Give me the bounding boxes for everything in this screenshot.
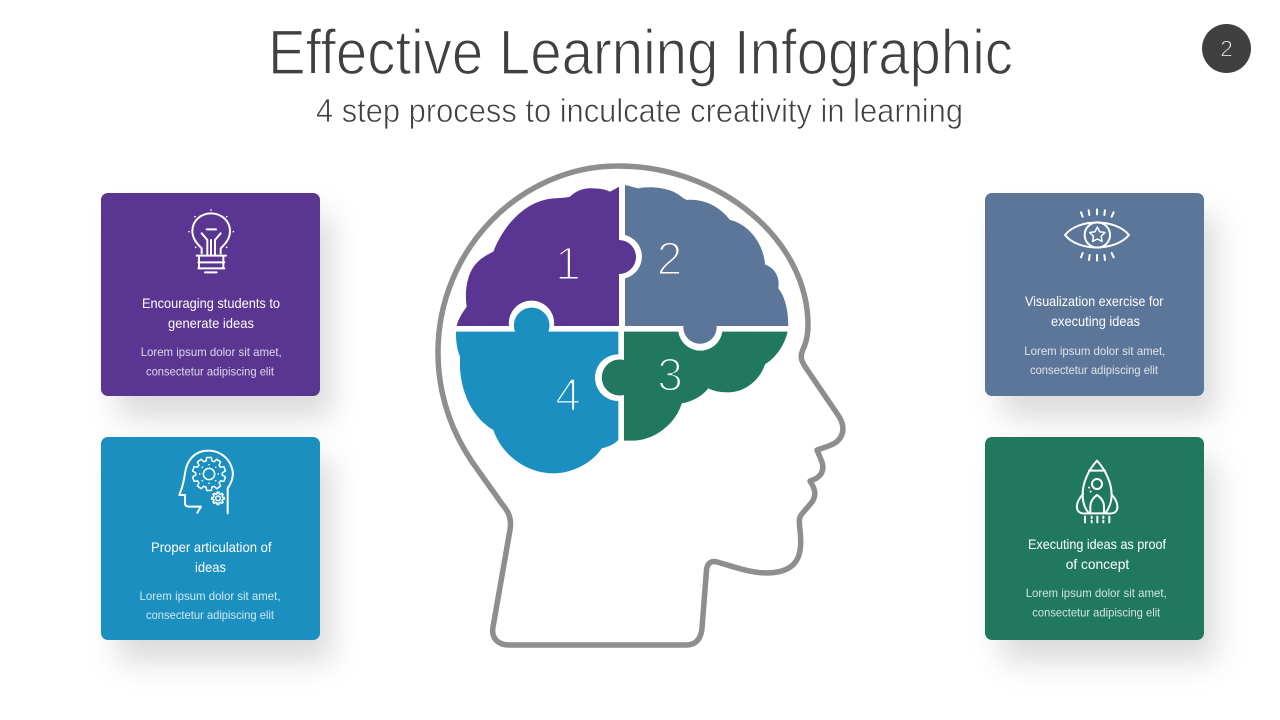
puzzle piece 3: 3 bbox=[657, 348, 683, 400]
puzzle piece 3 bbox=[602, 332, 788, 441]
card body text bbox=[140, 589, 280, 622]
card body text: Lorem ipsum dolor sit amet, bbox=[141, 345, 282, 359]
card heading bbox=[142, 295, 280, 331]
puzzle piece 4: 4 bbox=[555, 368, 581, 420]
icon: eye with star bbox=[1065, 209, 1129, 261]
card body text: consectetur adipiscing elit bbox=[1030, 363, 1159, 377]
card body text: Lorem ipsum dolor sit amet, bbox=[140, 589, 280, 603]
icon: head with gears bbox=[179, 451, 233, 513]
puzzle piece 2 bbox=[625, 185, 788, 344]
card body text bbox=[141, 345, 282, 378]
card heading: Visualization exercise for bbox=[1025, 293, 1164, 309]
card body text: Lorem ipsum dolor sit amet, bbox=[1026, 586, 1167, 600]
card heading bbox=[1028, 536, 1166, 572]
icon: rocket bbox=[1077, 461, 1117, 522]
page number badge: 2 bbox=[1220, 36, 1233, 62]
subtitle: 4 step process to inculcate creativity in learning bbox=[316, 92, 963, 129]
card body text: consectetur adipiscing elit bbox=[146, 364, 275, 378]
card heading: Executing ideas as proof bbox=[1028, 536, 1166, 552]
card body text bbox=[1024, 344, 1165, 377]
page number badge bbox=[1202, 24, 1251, 73]
card heading bbox=[1025, 293, 1164, 329]
card heading: generate ideas bbox=[168, 315, 254, 331]
panel: step 3 green card bbox=[985, 437, 1216, 662]
card heading: of concept bbox=[1066, 556, 1129, 572]
card heading: executing ideas bbox=[1051, 313, 1140, 329]
puzzle piece 1 bbox=[457, 187, 636, 326]
card body text: consectetur adipiscing elit bbox=[1032, 606, 1161, 620]
head outline bbox=[438, 166, 843, 645]
icon: light bulb bbox=[188, 209, 234, 272]
panel: step 2 slate card bbox=[985, 193, 1216, 418]
card body text: consectetur adipiscing elit bbox=[146, 608, 275, 622]
puzzle piece 2: 2 bbox=[657, 232, 682, 284]
puzzle piece 4 bbox=[456, 308, 618, 473]
brain puzzle bbox=[456, 185, 788, 473]
title: Effective Learning Infographic bbox=[268, 18, 1013, 88]
puzzle piece 1: 1 bbox=[555, 238, 581, 290]
panel: step 4 blue card bbox=[101, 437, 332, 662]
card heading: Encouraging students to bbox=[142, 295, 280, 311]
panel: step 1 purple card bbox=[101, 193, 332, 418]
card heading: ideas bbox=[195, 559, 226, 575]
card body text: Lorem ipsum dolor sit amet, bbox=[1024, 344, 1165, 358]
card heading bbox=[151, 539, 272, 575]
card body text bbox=[1026, 586, 1167, 620]
card heading: Proper articulation of bbox=[151, 539, 272, 555]
